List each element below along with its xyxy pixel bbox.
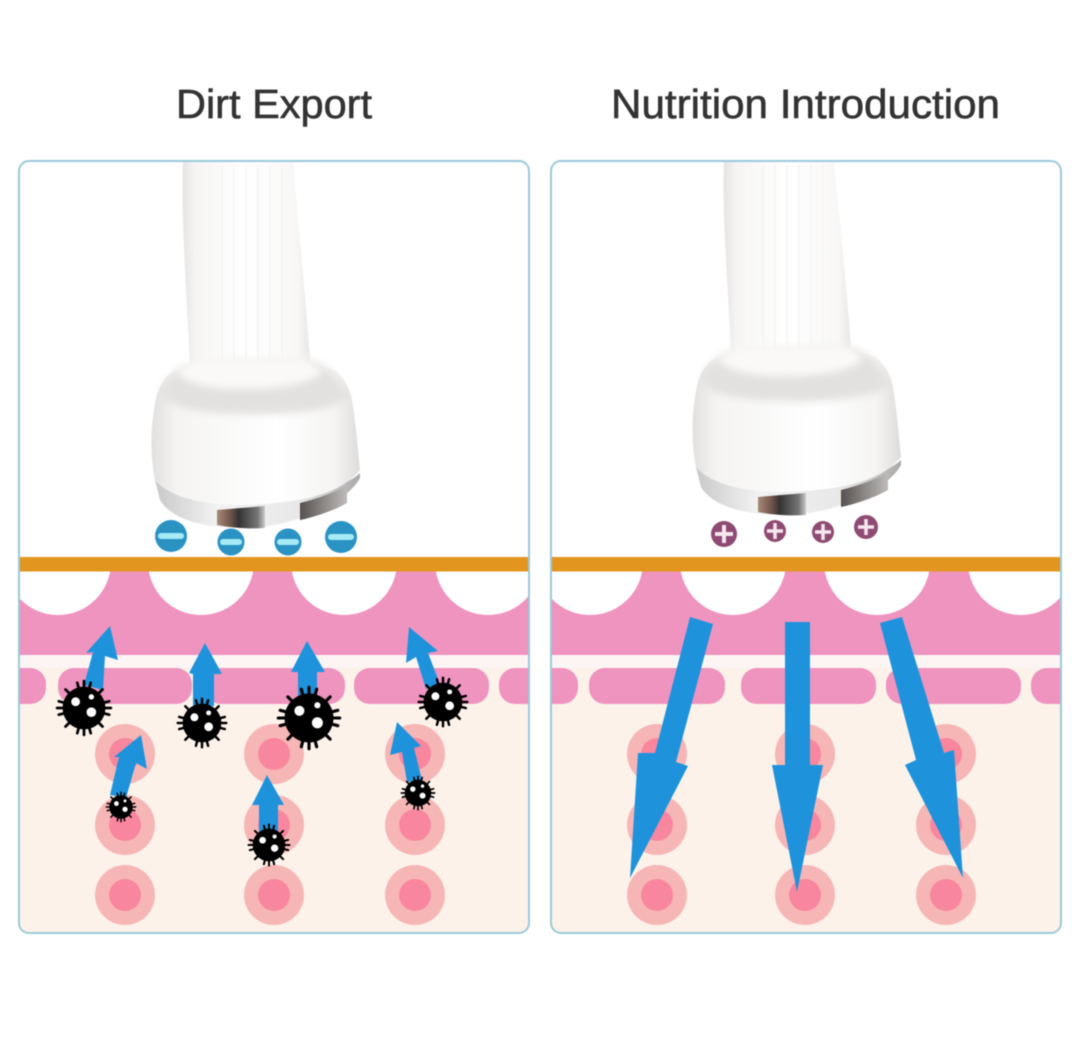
device: nutrition head (692, 162, 901, 515)
panel: dirt export (0, 161, 559, 933)
device: dirt export head (151, 162, 360, 528)
skin layers right (551, 571, 1061, 932)
orange skin surface right (551, 557, 1061, 572)
arrows: dirt moving up (84, 626, 440, 832)
title: Nutrition Introduction: Nutrition Introduction (611, 81, 1000, 127)
germs: dirt particles (57, 678, 467, 865)
ions: negative charges (155, 520, 357, 556)
panel border left (19, 161, 529, 933)
panel border right (551, 161, 1061, 933)
title: Dirt Export: Dirt Export (176, 81, 373, 127)
orange skin surface (19, 557, 529, 572)
panel: nutrition introduction (520, 161, 1080, 933)
cells left (95, 724, 445, 925)
arrows: nutrition moving down (630, 617, 963, 892)
skin layers left (19, 571, 529, 932)
cells right (627, 724, 976, 925)
ions: positive charges (711, 515, 878, 547)
